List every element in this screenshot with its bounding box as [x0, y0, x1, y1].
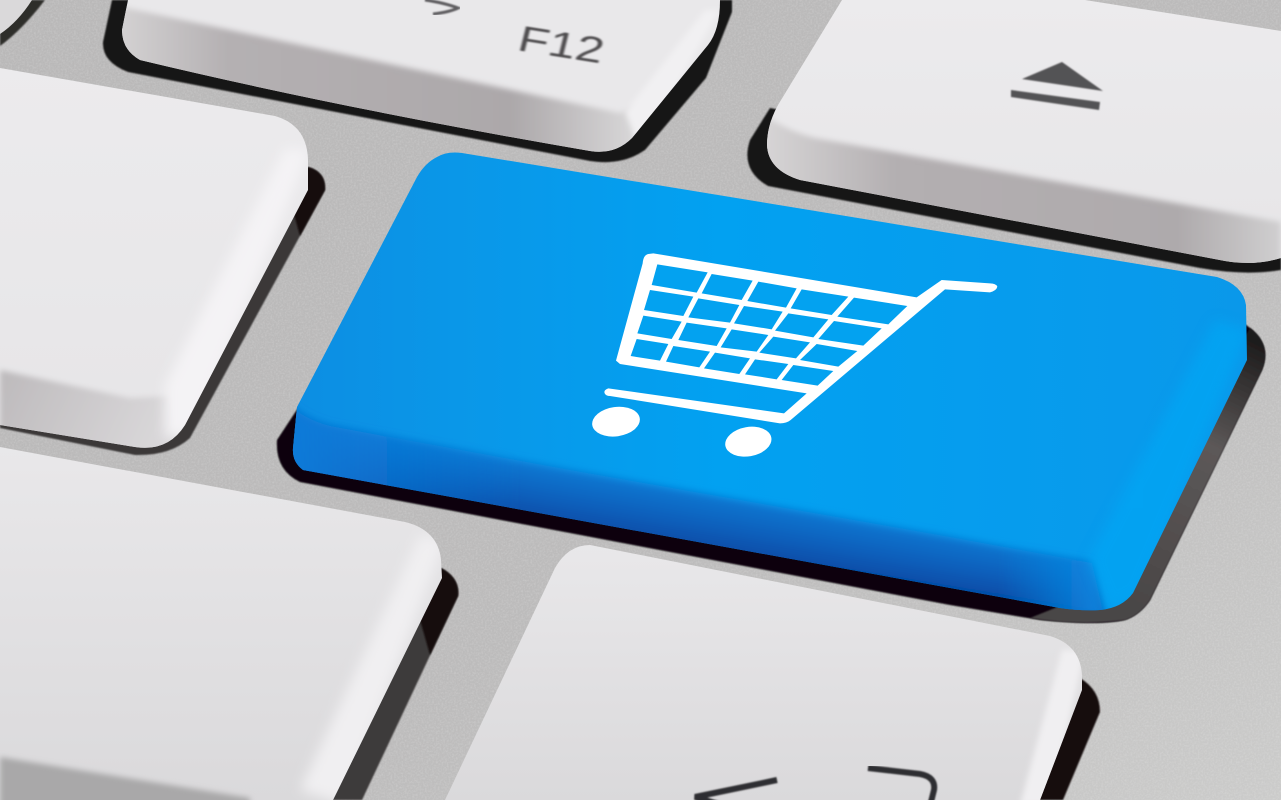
blue key body [280, 140, 1260, 620]
icon: eject symbol [1011, 62, 1103, 110]
key: eject [747, 0, 1281, 280]
blue key front face left light [292, 408, 475, 501]
icon: volume mark [425, 0, 458, 14]
blue key well [277, 320, 1265, 623]
key: top-left corner fragment [0, 0, 45, 46]
cart frame [604, 253, 997, 423]
key: F12 [100, 0, 740, 170]
label: F12: F12 [514, 19, 608, 71]
icon: shopping cart [590, 253, 997, 460]
blue key front face [280, 400, 1105, 620]
blue key front face right light [1017, 560, 1104, 610]
key: bottom-right arrows [440, 540, 1100, 800]
key: middle-left [0, 60, 325, 460]
key: blue shopping cart [280, 140, 1260, 620]
blue key right bevel [1088, 320, 1250, 612]
cart wheels [590, 404, 774, 460]
key: bottom-left [0, 440, 458, 800]
basket cells [631, 264, 907, 386]
label: arrows [695, 768, 934, 800]
